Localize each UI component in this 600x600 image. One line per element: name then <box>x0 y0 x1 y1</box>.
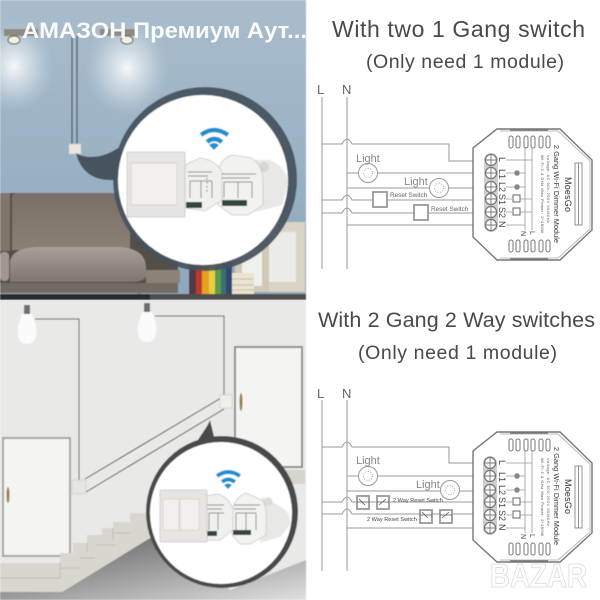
light 2: Light <box>416 479 440 491</box>
wiring diagram: two 1 gang switches <box>317 82 592 269</box>
light 1: Light <box>356 153 380 165</box>
icon: bulb right <box>138 303 156 342</box>
module: S1 <box>497 497 507 508</box>
module: Voltage: AC 90V-250V 50/60Hz <box>546 458 551 526</box>
module <box>473 432 592 562</box>
wall wires <box>72 36 77 145</box>
module: L2 <box>497 182 507 192</box>
module: N <box>519 534 526 539</box>
light 2: Light <box>404 176 428 188</box>
stairs <box>0 513 150 592</box>
module: L1 <box>497 472 507 482</box>
floor <box>0 294 306 300</box>
heading: top diagram: (Only need 1 module) <box>366 51 564 73</box>
2 way switch pair 2 <box>367 510 452 523</box>
reset switch 1 <box>373 192 428 207</box>
L and N labels: N <box>342 82 351 97</box>
2 way switch pair 1 <box>357 496 443 509</box>
L and N labels <box>317 386 351 401</box>
books <box>189 262 254 295</box>
module: S2 <box>497 207 507 218</box>
wires <box>35 316 224 492</box>
L and N labels: L <box>317 386 324 401</box>
L and N labels: L <box>317 82 324 97</box>
module: L <box>528 231 535 235</box>
L and N labels <box>317 82 351 97</box>
L and N labels: N <box>342 386 351 401</box>
module: MoesGo <box>563 479 573 514</box>
module: L <box>497 157 507 162</box>
light 1: Light <box>356 455 380 467</box>
module: L <box>497 460 507 465</box>
light 2 <box>416 479 460 500</box>
switch: single rocker <box>127 152 185 217</box>
wall switch <box>69 144 81 154</box>
callout bubble: two gang <box>146 420 298 588</box>
reset switch 2: Reset Switch <box>431 206 469 213</box>
module: 2 Gang Wi-Fi Dimmer Module <box>552 145 561 243</box>
wall switch left <box>72 480 86 494</box>
module: gang relay pair <box>205 493 290 544</box>
wires <box>322 97 473 269</box>
picture frames <box>235 222 305 292</box>
callout bubble: one gang <box>76 87 297 271</box>
module: L1 <box>497 169 507 179</box>
panel: living room scene <box>0 0 306 300</box>
light 1 <box>356 153 380 182</box>
under-stair shadow <box>0 538 306 600</box>
module: Wi-Fi:2.4 GHz Max Power: 2*150W <box>540 458 545 536</box>
module: N <box>497 524 507 530</box>
wall switch right <box>220 395 232 408</box>
icon: bulb left <box>18 305 36 344</box>
heading: bottom diagram: (Only need 1 module) <box>358 342 557 364</box>
icon: wifi <box>217 472 240 489</box>
ledge <box>280 470 305 484</box>
module: 2 Gang Wi-Fi Dimmer Module <box>552 447 561 545</box>
wiring diagram: 2 gang 2 way switches <box>317 386 592 571</box>
module: Voltage: AC 90V-250V 50/60Hz <box>546 155 551 223</box>
module: gang relay pair <box>185 155 288 215</box>
reset switch 1: Reset Switch <box>390 192 428 199</box>
2 way switch pair 1: 2 Way Reset Switch <box>393 498 443 504</box>
module: L2 <box>497 485 507 495</box>
module: S1 <box>497 194 507 205</box>
module: N <box>519 231 526 236</box>
switch: double rocker <box>160 490 207 542</box>
title overlay: АМАЗОН Премиум Аут... <box>22 18 307 43</box>
2 way switch pair 2: 2 Way Reset Switch <box>367 517 417 523</box>
module: N <box>497 221 507 228</box>
reset switch 2 <box>414 205 469 220</box>
wall lamps <box>0 20 169 116</box>
module: MoesGo <box>563 177 573 212</box>
icon: wifi <box>201 130 228 150</box>
panel: staircase scene <box>0 300 306 600</box>
wires <box>322 400 473 571</box>
module <box>473 129 592 260</box>
heading: top diagram <box>332 16 585 73</box>
light 1 <box>356 455 380 486</box>
module: L <box>528 534 535 538</box>
module: S2 <box>497 510 507 521</box>
left door <box>3 438 70 556</box>
heading: top diagram: With two 1 Gang switch <box>332 16 585 42</box>
sofa <box>0 193 180 300</box>
heading: bottom diagram <box>318 308 595 364</box>
light 2 <box>404 176 448 198</box>
module: Wi-Fi:2.4 GHz Max Power: 2*150W <box>540 155 545 233</box>
heading: bottom diagram: With 2 Gang 2 Way switches <box>318 308 595 332</box>
right door <box>235 347 302 467</box>
